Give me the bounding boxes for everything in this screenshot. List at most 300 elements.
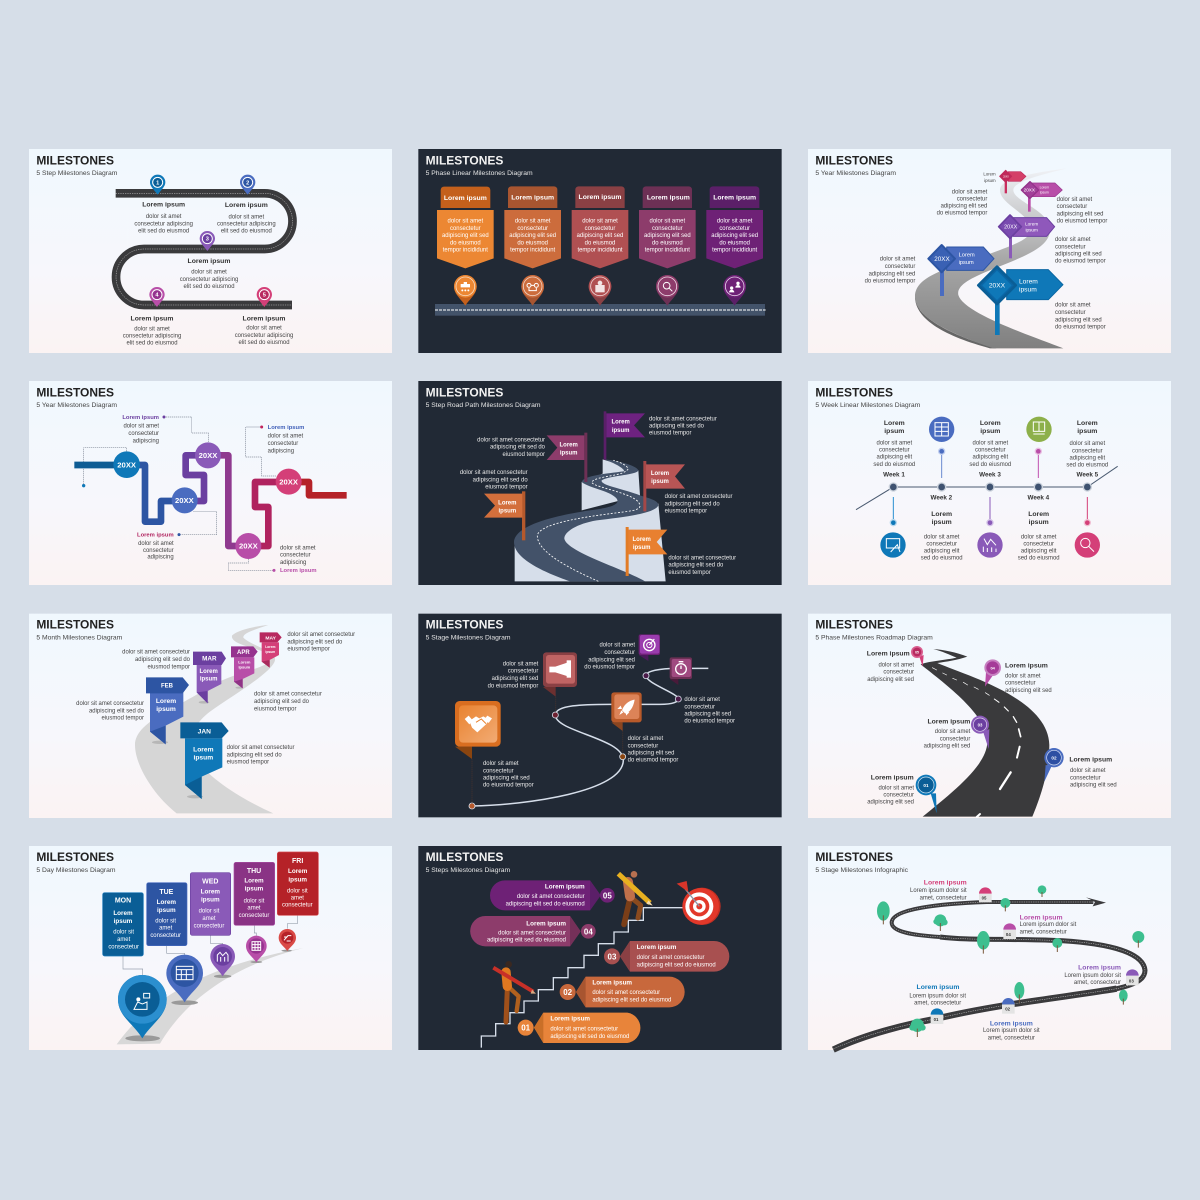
card TUE: Lorem xyxy=(157,899,176,906)
phase 2 xyxy=(504,186,561,268)
winding road xyxy=(116,193,292,305)
timeline nodes xyxy=(889,483,1091,491)
text 01: consectetur xyxy=(883,792,914,798)
card THU: THU xyxy=(247,868,261,875)
heading: MILESTONES xyxy=(426,153,503,167)
hill base xyxy=(515,459,666,581)
phase 5: tempor incididunt xyxy=(712,247,758,253)
text stage 4: do eiusmod tempor xyxy=(684,719,735,725)
climber with red pencil xyxy=(493,961,536,1022)
pin THU xyxy=(246,936,267,962)
text middle left: do eiusmod tempor xyxy=(865,278,915,284)
signpost blue: 20XX xyxy=(934,256,951,263)
phase 3 xyxy=(572,186,628,268)
card TUE: TUE xyxy=(159,889,174,896)
heading: MILESTONES xyxy=(815,385,893,399)
phase 4: Lorem ipsum xyxy=(647,195,690,202)
card FRI xyxy=(277,852,318,915)
label bottom right: adipiscing xyxy=(280,560,306,566)
pin 04: 04 xyxy=(990,665,996,670)
callout 04: 04 xyxy=(584,927,593,936)
flag purple: Lorem xyxy=(612,420,630,426)
text red flag: dolor sit amet consectetur xyxy=(665,494,732,500)
banner FEB: ipsum xyxy=(156,706,176,713)
text middle right: do eiusmod tempor xyxy=(1055,259,1106,265)
text week 1 xyxy=(873,420,915,468)
node 2: 20XX xyxy=(175,496,195,505)
slide background xyxy=(808,846,1171,1050)
pink sign label: ipsum xyxy=(984,178,996,183)
week 3 stem and icon xyxy=(977,497,1003,558)
text stage 2: consectetur xyxy=(628,743,658,749)
callout 03: Lorem ipsum xyxy=(637,944,677,951)
callout 01: adipiscing elit sed do eiusmod xyxy=(550,1034,629,1040)
text APR: adipiscing elit sed do xyxy=(254,699,310,705)
pin MON xyxy=(118,975,167,1038)
text middle left: adipiscing elit sed xyxy=(869,271,915,277)
panel: 5 stage milestones infographic xyxy=(808,846,1171,1050)
card WED: consectetur xyxy=(194,923,224,929)
text week 2: consectetur xyxy=(926,541,957,547)
phase 2: consectetur xyxy=(517,226,548,232)
road ribbon xyxy=(117,948,303,1044)
text 04: Lorem ipsum dolor sit xyxy=(1020,922,1077,928)
node 3 xyxy=(195,442,221,468)
banner JAN: Lorem xyxy=(193,746,214,753)
node 4 xyxy=(235,533,261,559)
heading: MILESTONES xyxy=(36,618,114,632)
step 3 text xyxy=(180,258,238,290)
label bottom right xyxy=(280,545,317,574)
stems xyxy=(472,697,623,803)
pin 02: 02 xyxy=(1051,756,1057,761)
signpost blue: Lorem xyxy=(959,253,975,259)
phase 4: consectetur xyxy=(652,226,683,232)
label bottom left: adipiscing xyxy=(147,555,174,561)
text red flag: eiusmod tempor xyxy=(665,509,707,515)
panel: 5 steps staircase xyxy=(418,846,782,1050)
label top left: dolor sit amet xyxy=(123,424,159,430)
text 05 xyxy=(910,880,967,901)
banner shadows xyxy=(152,687,243,798)
banner MAY: ipsum xyxy=(265,650,275,654)
card TUE: ipsum xyxy=(157,907,176,914)
label bottom right: consectetur xyxy=(280,553,311,559)
node 4: 20XX xyxy=(239,542,259,551)
card THU: consectetur xyxy=(239,913,269,919)
node 2 xyxy=(172,487,198,513)
text magenta flag: adipiscing elit sed do xyxy=(490,445,546,451)
text week 1: ipsum xyxy=(884,428,904,435)
pin 04 xyxy=(984,659,1001,687)
step 2 text xyxy=(217,202,276,235)
target with dart xyxy=(677,881,721,925)
callout 03 xyxy=(604,941,729,972)
road xyxy=(135,625,275,813)
milepost 01: 01 xyxy=(934,1017,939,1022)
pin 4 xyxy=(149,287,165,307)
text 02: consectetur xyxy=(1070,775,1101,781)
step 4 text xyxy=(123,315,181,347)
phase 5: adipiscing elit sed xyxy=(711,233,758,239)
text week 5: ipsum xyxy=(1077,428,1097,435)
tile: megaphone xyxy=(543,652,577,697)
text stage 5: consectetur xyxy=(604,650,635,656)
banner MAR xyxy=(193,652,226,703)
text MAR: adipiscing elit sed do xyxy=(135,657,191,663)
text magenta flag: eiusmod tempor xyxy=(503,452,545,458)
step 5 text xyxy=(235,315,293,346)
step 3 text: consectetur adipiscing xyxy=(180,277,238,283)
callout 04 xyxy=(470,916,596,946)
text bottom right: dolor sit amet xyxy=(1055,303,1091,309)
callout 02: 02 xyxy=(563,988,573,997)
subheading: 5 Year Milestones Diagram xyxy=(36,402,117,409)
text FEB: eiusmod tempor xyxy=(102,716,144,722)
signpost purple xyxy=(999,215,1055,258)
card WED: amet xyxy=(202,916,216,922)
text stage 2: adipiscing elit sed xyxy=(628,751,674,757)
label top right xyxy=(268,425,304,454)
phase 5: do eiusmod xyxy=(719,240,750,246)
text week 3 xyxy=(969,420,1011,468)
text week 3: consectetur xyxy=(975,448,1006,454)
pin 02 xyxy=(1044,748,1064,782)
phase 1: Lorem ipsum xyxy=(444,195,487,202)
text MAY: eiusmod tempor xyxy=(287,647,330,653)
text brown flag: adipiscing elit sed do xyxy=(473,477,528,483)
text week 5 xyxy=(1066,420,1108,469)
text stage 3: adipiscing elit sed xyxy=(492,676,538,682)
phase 5 xyxy=(706,186,763,268)
banner MAY: Lorem xyxy=(265,645,275,649)
phase 2: tempor incididunt xyxy=(510,247,556,253)
text 03: consectetur xyxy=(940,736,970,742)
heading: MILESTONES xyxy=(426,850,503,864)
card MON: ipsum xyxy=(114,918,133,925)
text red flag: adipiscing elit sed do xyxy=(665,501,720,507)
pin 01: 01 xyxy=(923,783,929,788)
road dashes xyxy=(932,668,1021,817)
phase 5: dolor sit amet xyxy=(717,219,753,225)
text orange flag: adipiscing elit sed do xyxy=(668,563,724,569)
pin 3: 3 xyxy=(206,237,209,243)
phase 3: do eiusmod xyxy=(585,240,615,246)
banner MAR: ipsum xyxy=(200,677,217,683)
text stage 5: dolor sit amet xyxy=(599,643,635,649)
pin 05: 05 xyxy=(915,650,919,654)
step 3 text: elit sed do eiusmod xyxy=(183,284,235,290)
callout 01 xyxy=(518,1013,640,1043)
text JAN: dolor sit amet consectetur xyxy=(227,745,294,751)
text stage 4: adipiscing elit sed xyxy=(684,712,731,718)
phase 5: consectetur xyxy=(719,226,750,232)
text stage 4: dolor sit amet xyxy=(684,697,720,703)
phase 2: adipiscing elit sed xyxy=(509,233,556,239)
subheading: 5 Stage Milestones Infographic xyxy=(815,867,909,874)
callout 05: 05 xyxy=(603,891,612,900)
text MAR: dolor sit amet consectetur xyxy=(122,650,190,656)
pin 4: 4 xyxy=(155,293,159,299)
flag red xyxy=(643,461,685,511)
pin 1: 1 xyxy=(156,180,159,186)
card TUE: consectetur xyxy=(150,933,181,939)
subheading: 5 Year Milestones Diagram xyxy=(815,170,896,177)
text week 5: sed do eiusmod xyxy=(1066,463,1108,469)
step 4 text: elit sed do eiusmod xyxy=(126,341,178,347)
banner FEB: Lorem xyxy=(156,698,176,705)
pin FRI xyxy=(279,929,296,951)
text 01: Lorem ipsum xyxy=(917,984,959,991)
phase 4: dolor sit amet xyxy=(650,219,685,225)
signpost magenta xyxy=(1021,182,1062,212)
pin 03 xyxy=(971,716,989,749)
signpost magenta: Lorem xyxy=(1040,186,1049,190)
label bottom right: Lorem ipsum xyxy=(280,568,317,574)
banner MAR: MAR xyxy=(202,655,217,662)
connector dots xyxy=(82,415,275,572)
phase 5 pin icon xyxy=(723,275,746,306)
text stage 3: do eiusmod tempor xyxy=(488,683,538,689)
label top right: consectetur xyxy=(268,441,298,447)
week labels: Week 2 xyxy=(930,494,953,501)
text top right: adipiscing elit sed xyxy=(1057,211,1103,217)
card MON: Lorem xyxy=(113,910,133,917)
text stage 3: consectetur xyxy=(508,669,538,675)
heading: MILESTONES xyxy=(815,618,893,632)
text week 2: dolor sit amet xyxy=(924,534,960,540)
banner MAY: MAY xyxy=(265,635,277,641)
signpost purple: Lorem xyxy=(1025,222,1038,227)
text JAN: adipiscing elit sed do xyxy=(227,752,282,758)
text 03: dolor sit amet xyxy=(935,729,971,735)
flag brown xyxy=(484,491,525,540)
subheading: 5 Step Milestones Diagram xyxy=(36,170,118,177)
text 04: dolor sit amet xyxy=(1005,673,1041,679)
card MON: dolor sit xyxy=(113,930,134,936)
text 01: amet, consectetur xyxy=(914,1001,961,1007)
text bottom right: adipiscing elit sed xyxy=(1055,317,1102,323)
callout 04: adipiscing elit sed do eiusmod xyxy=(487,938,566,944)
text 05: adipiscing elit sed xyxy=(867,677,914,683)
step 3 text: dolor sit amet xyxy=(191,270,227,276)
signpost purple: ipsum xyxy=(1025,228,1038,233)
phase 2: dolor sit amet xyxy=(515,219,551,225)
text week 1: adipiscing elit xyxy=(877,455,912,461)
card TUE: amet xyxy=(159,926,173,932)
panel: 5 phase milestones roadmap xyxy=(808,614,1171,818)
flag red: ipsum xyxy=(651,479,669,485)
signpost pink xyxy=(1000,170,1026,193)
tile: rocket xyxy=(611,692,642,731)
panel: 5 month milestones xyxy=(29,614,392,818)
signpost pink: 20XX xyxy=(1003,176,1009,178)
week 2 stem and icon xyxy=(929,417,954,478)
week labels xyxy=(883,472,1099,501)
road arrow head xyxy=(1086,897,1106,906)
pin WED xyxy=(210,944,235,976)
text stage 2: do eiusmod tempor xyxy=(628,758,678,764)
callout 02: dolor sit amet consectetur xyxy=(592,990,660,996)
pin 5 xyxy=(257,287,272,307)
panel: 5 stage milestones path xyxy=(418,614,782,817)
text 01: adipiscing elit sed xyxy=(867,800,914,806)
subheading: 5 Week Linear Milestones Diagram xyxy=(815,402,921,409)
timeline xyxy=(856,466,1118,510)
pin 3 xyxy=(200,231,215,251)
text middle right: dolor sit amet xyxy=(1055,237,1091,243)
step 5 text: Lorem ipsum xyxy=(243,315,285,322)
text purple flag: dolor sit amet consectetur xyxy=(649,416,717,422)
step 1 text: elit sed do eiusmod xyxy=(138,228,189,234)
subheading: 5 Phase Milestones Roadmap Diagram xyxy=(815,635,933,642)
text 04: amet, consectetur xyxy=(1020,929,1067,935)
text 04 xyxy=(1005,662,1052,694)
subheading: 5 Month Milestones Diagram xyxy=(36,635,123,642)
callout 03: 03 xyxy=(608,952,617,961)
phase 1: adipiscing elit sed xyxy=(442,233,489,239)
text 05: consectetur xyxy=(883,670,914,676)
card TUE: dolor sit xyxy=(155,918,176,924)
text 02 xyxy=(983,1021,1040,1041)
text 05: Lorem ipsum xyxy=(867,651,910,658)
pin 05 xyxy=(911,646,924,667)
text 05: Lorem ipsum xyxy=(924,880,967,887)
text 02: Lorem ipsum dolor sit xyxy=(983,1028,1040,1034)
card FRI: FRI xyxy=(292,858,303,865)
banner APR: ipsum xyxy=(238,664,251,669)
flag brown: Lorem xyxy=(498,501,516,507)
phase 1: do eiusmod xyxy=(450,240,481,246)
text week 4: adipiscing elit xyxy=(1021,549,1057,555)
card WED: ipsum xyxy=(201,896,220,903)
step 4 text: dolor sit amet xyxy=(134,326,170,332)
text bottom right: do eiusmod tempor xyxy=(1055,324,1106,330)
week labels: Week 4 xyxy=(1027,494,1050,501)
subheading: 5 Stage Milestones Diagram xyxy=(426,635,511,642)
phase 3: Lorem ipsum xyxy=(579,194,621,201)
callout 04: Lorem ipsum xyxy=(526,920,566,927)
text top left: do eiusmod tempor xyxy=(937,211,987,217)
week 5 stem and icon xyxy=(1075,497,1100,558)
week labels: Week 5 xyxy=(1076,472,1099,479)
phase 4: adipiscing elit sed xyxy=(644,233,691,239)
step 2 text: Lorem ipsum xyxy=(225,202,268,209)
callout 05 xyxy=(490,880,615,910)
heading: MILESTONES xyxy=(815,850,893,864)
flag purple: ipsum xyxy=(612,428,629,434)
card FRI: dolor sit xyxy=(287,888,308,894)
label bottom left: Lorem ipsum xyxy=(137,532,174,538)
milepost 03 xyxy=(1126,969,1139,985)
text stage 5: do eiusmod tempor xyxy=(584,665,635,671)
heading: MILESTONES xyxy=(36,850,114,864)
text week 2: sed do eiusmod xyxy=(921,556,963,562)
text week 2: Lorem xyxy=(931,511,952,518)
card THU: amet xyxy=(247,906,261,912)
signpost magenta: ipsum xyxy=(1040,190,1049,194)
callout 01: dolor sit amet consectetur xyxy=(550,1027,618,1033)
phase 1 pin icon xyxy=(454,275,477,306)
winding road xyxy=(833,902,1145,1050)
step 2 text: dolor sit amet xyxy=(229,214,264,220)
text stage 5: adipiscing elit sed xyxy=(588,657,635,663)
phase 4 xyxy=(639,186,696,268)
text 02: Lorem ipsum xyxy=(1069,757,1112,764)
card WED: WED xyxy=(202,879,218,886)
heading: MILESTONES xyxy=(36,385,114,399)
callout 02: adipiscing elit sed do eiusmod xyxy=(592,997,671,1003)
text MAR: eiusmod tempor xyxy=(148,664,190,670)
slide background xyxy=(418,846,782,1050)
text middle right: consectetur xyxy=(1055,244,1086,250)
pin 2: 2 xyxy=(246,180,249,186)
text 01: Lorem ipsum xyxy=(871,774,914,781)
panel: 5 week linear milestones xyxy=(808,381,1171,585)
text MAY: dolor sit amet consectetur xyxy=(287,632,355,638)
text 01 xyxy=(909,984,966,1007)
text week 5: consectetur xyxy=(1072,448,1103,454)
signpost blue: ipsum xyxy=(959,260,974,266)
label top right: dolor sit amet xyxy=(268,434,304,440)
callout 02: Lorem ipsum xyxy=(592,979,632,986)
phase 5: Lorem ipsum xyxy=(713,194,756,201)
slide background xyxy=(29,381,392,585)
slide background xyxy=(29,149,392,353)
text stage 1: dolor sit amet xyxy=(483,761,519,767)
staircase xyxy=(481,908,693,1048)
slide background xyxy=(808,149,1171,353)
pipeline segments xyxy=(74,455,347,546)
slide background xyxy=(29,614,392,818)
step 5 text: consectetur adipiscing xyxy=(235,333,293,339)
text 04 xyxy=(1020,914,1077,935)
card MON: MON xyxy=(115,898,131,905)
heading: MILESTONES xyxy=(426,385,503,399)
label top left: Lorem ipsum xyxy=(122,415,159,421)
signpost large blue: Lorem xyxy=(1019,279,1038,286)
card WED xyxy=(190,873,231,935)
subheading: 5 Phase Linear Milestones Diagram xyxy=(426,170,533,177)
text week 4: ipsum xyxy=(1029,519,1049,526)
card THU: Lorem xyxy=(244,878,264,885)
card MON: amet xyxy=(117,937,131,943)
banner APR: Lorem xyxy=(238,660,251,665)
flag magenta: Lorem xyxy=(560,443,578,449)
curved path xyxy=(472,668,708,806)
label top left: consectetur xyxy=(128,431,159,437)
step 4 text: Lorem ipsum xyxy=(131,315,173,322)
flag orange xyxy=(626,527,667,576)
text 03 xyxy=(1064,964,1121,986)
text week 3: dolor sit amet xyxy=(973,440,1008,446)
step 5 text: dolor sit amet xyxy=(246,326,282,332)
text 04: consectetur xyxy=(1005,681,1036,687)
node 3: 20XX xyxy=(199,451,218,460)
slide background xyxy=(418,614,782,817)
text FEB: dolor sit amet consectetur xyxy=(76,701,144,707)
text MAY: adipiscing elit sed do xyxy=(287,639,343,645)
banner MAY xyxy=(260,632,282,668)
text week 1: consectetur xyxy=(879,448,910,454)
text week 4 xyxy=(1018,511,1060,562)
milepost 04: 04 xyxy=(1006,932,1011,937)
text week 1: Lorem xyxy=(884,420,905,427)
milepost 01 xyxy=(931,1008,943,1024)
text week 2 xyxy=(921,511,963,562)
path nodes xyxy=(469,673,681,809)
step 5 text: elit sed do eiusmod xyxy=(238,340,290,346)
